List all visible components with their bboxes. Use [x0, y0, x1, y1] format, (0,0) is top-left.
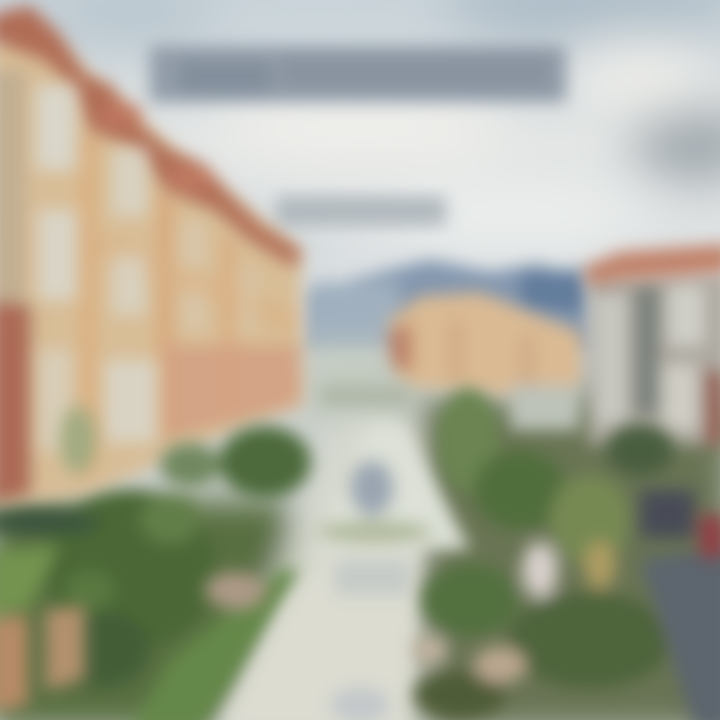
- central paved path: [218, 385, 470, 720]
- parked cars: [640, 490, 720, 557]
- building: right block: [588, 275, 720, 445]
- midground pale ground: [300, 345, 600, 440]
- lawn and path base: [0, 400, 720, 720]
- lawn left: [0, 545, 300, 720]
- building: left block roof: [0, 5, 300, 268]
- trees along the left block: [0, 406, 311, 688]
- building: centre block: [388, 292, 582, 430]
- trees along the right side: [412, 388, 674, 719]
- building: left apartment block: [0, 30, 304, 510]
- building: left block windows: [36, 85, 256, 450]
- road at lower right: [640, 545, 720, 720]
- sky with clouds: [0, 0, 720, 340]
- building: right block roof: [582, 244, 720, 285]
- blurred title block: [150, 46, 566, 102]
- blurred subtitle block: [276, 196, 446, 226]
- distant mountains: [305, 260, 590, 350]
